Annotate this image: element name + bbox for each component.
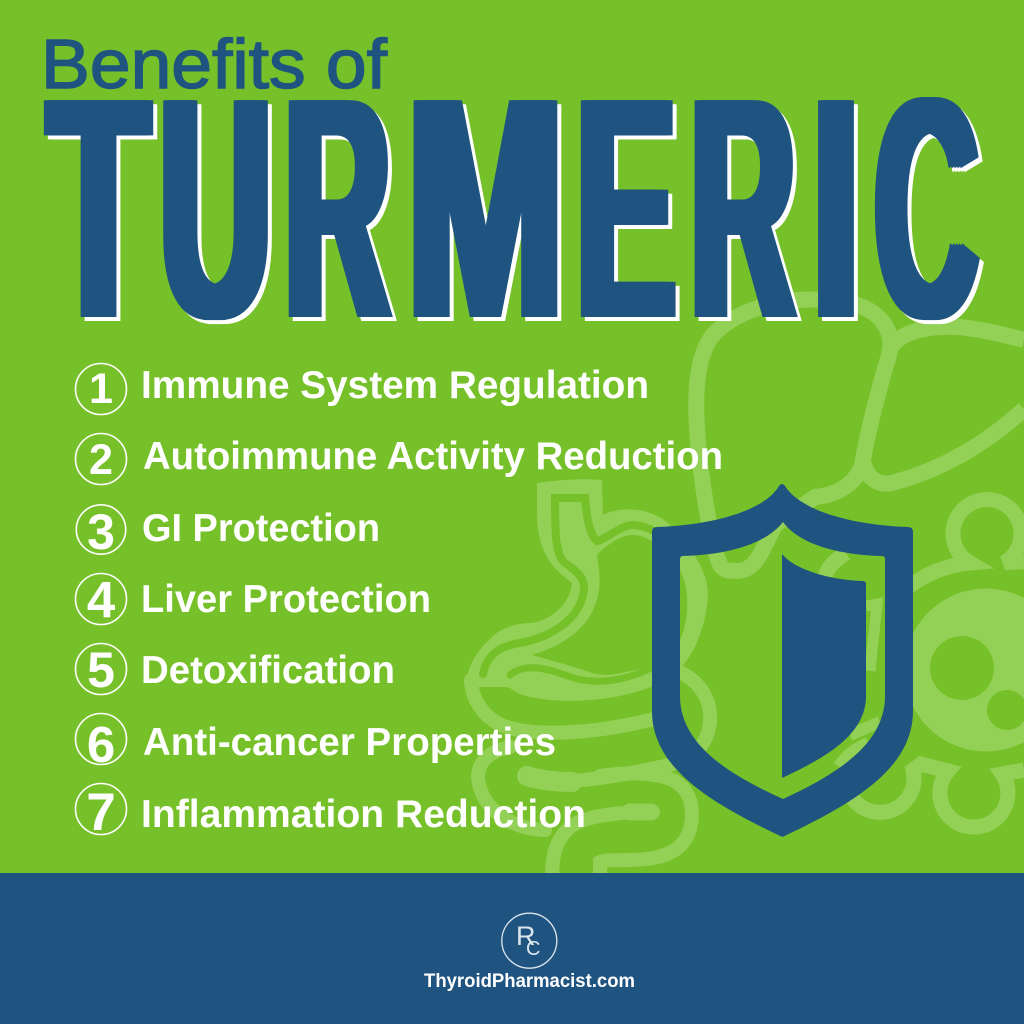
title: TURMERIC: U (160, 32, 272, 384)
title: TURMERIC: I (813, 32, 859, 384)
shield outline (652, 484, 913, 837)
item 5: 5 (87, 642, 115, 698)
item 4: Liver Protection (141, 578, 431, 621)
item 5: Detoxification (141, 649, 395, 692)
item 3: GI Protection (142, 507, 380, 550)
item 7: 7 (86, 783, 116, 842)
item 2: 2 (89, 436, 113, 484)
title: TURMERIC: E (577, 32, 676, 384)
footer band (0, 873, 1024, 1024)
organ: stomach (466, 479, 708, 701)
background organ illustrations (466, 299, 1024, 880)
logo: RC monogram: R (516, 921, 536, 951)
item 4: 4 (87, 571, 116, 628)
subtitle: Benefits of (41, 25, 388, 103)
item 7: Inflammation Reduction (141, 793, 586, 836)
title: TURMERIC: R (285, 32, 390, 384)
organ: intestines (471, 672, 710, 880)
item 5 (76, 642, 395, 698)
organ: liver (696, 299, 1024, 571)
title: TURMERIC (44, 32, 984, 384)
item 6: Anti-cancer Properties (143, 721, 556, 764)
footer website text: ThyroidPharmacist.com (424, 971, 635, 992)
item 7 (76, 783, 586, 842)
item 6 (76, 714, 556, 773)
item 3: 3 (87, 504, 115, 560)
item 4 (76, 571, 431, 628)
title: TURMERIC: C (875, 32, 978, 384)
icon: shield (652, 484, 913, 837)
logo: RC monogram (502, 913, 557, 968)
title: TURMERIC: T (48, 32, 149, 384)
shield right half (782, 554, 866, 778)
item 1: Immune System Regulation (141, 364, 649, 407)
logo: RC monogram: C (526, 938, 540, 960)
numbered benefits list (76, 364, 723, 842)
item 3 (76, 504, 380, 560)
item 1: 1 (89, 365, 113, 413)
organ: bacteria cell (824, 500, 1024, 827)
title: TURMERIC: R (690, 32, 794, 384)
title: TURMERIC: M (407, 32, 564, 384)
item 6: 6 (87, 716, 115, 773)
item 2: Autoimmune Activity Reduction (143, 435, 723, 478)
